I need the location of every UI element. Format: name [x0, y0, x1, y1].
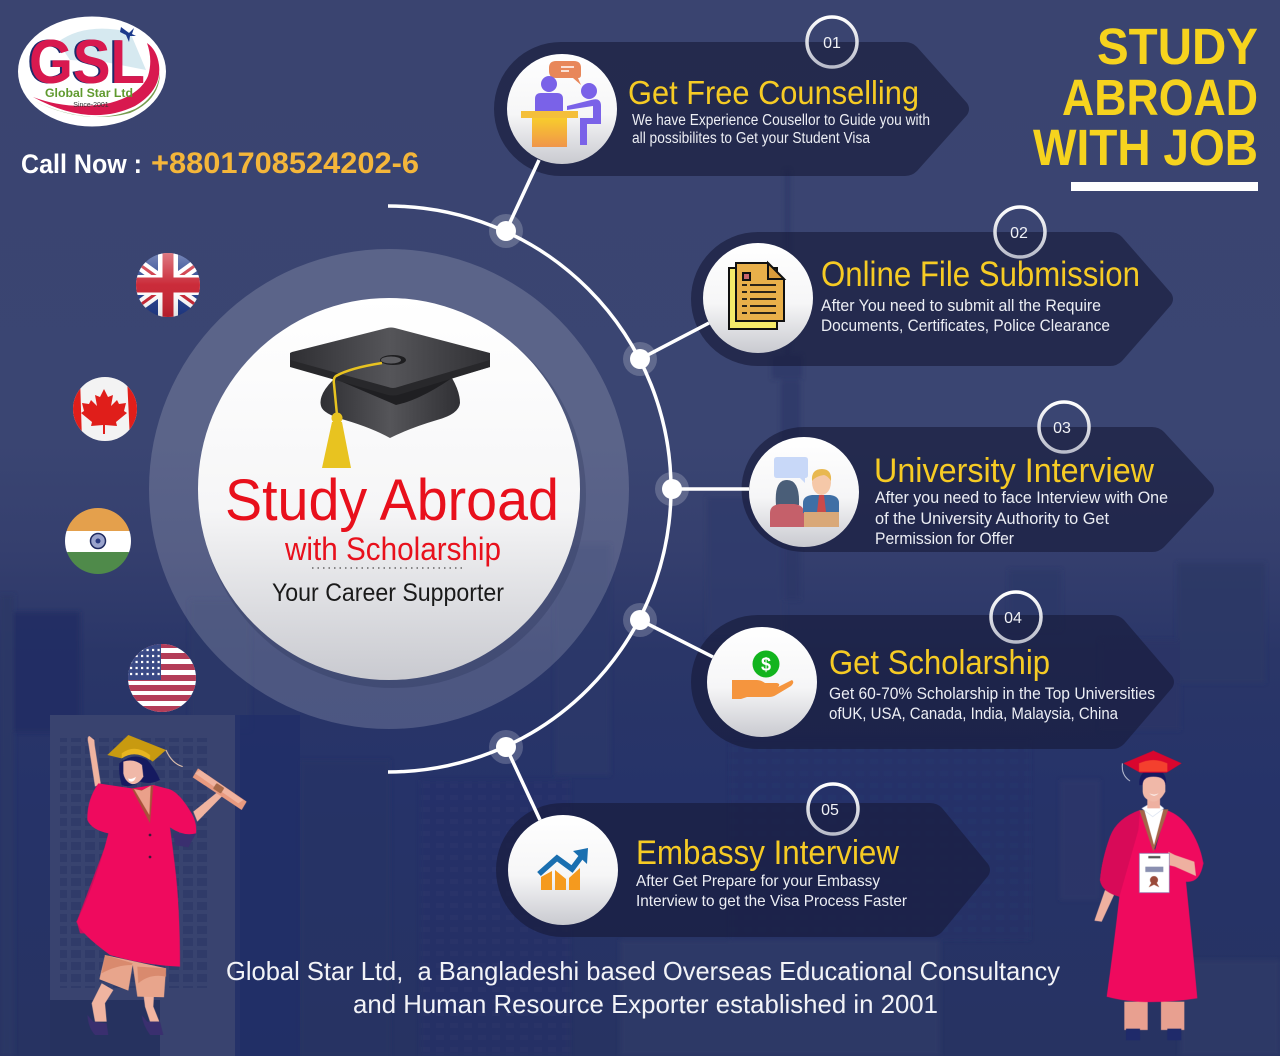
step 02: online file submission — [691, 207, 1173, 366]
step 02: online file submission: After You need to submit all the Require — [821, 297, 1101, 315]
call now phone line: +8801708524202-6 — [151, 147, 419, 180]
footer description: and Human Resource Exporter established in 2001 — [353, 989, 938, 1019]
step number 03: 03 — [1053, 420, 1071, 437]
step 03: university interview: University Interview — [874, 452, 1154, 490]
illustration: male graduate — [1094, 751, 1203, 1040]
headline: Your Career Supporter — [272, 579, 504, 607]
step 04: get scholarship: Get Scholarship — [829, 644, 1050, 682]
step 05: embassy interview: Embassy Interview — [636, 834, 899, 872]
headline — [225, 468, 559, 607]
step 03: university interview: of the University Authority to Get — [875, 510, 1109, 528]
icon: hand with dollar: $ — [761, 654, 771, 674]
icon: rising chart — [539, 848, 588, 890]
call now phone line — [21, 147, 419, 180]
step 05: embassy interview: After Get Prepare for your Embassy — [636, 873, 880, 890]
icon: counsellor at desk — [521, 61, 601, 147]
step number 02: 02 — [1010, 225, 1028, 242]
step 02: online file submission: Online File Submission — [821, 255, 1140, 294]
step 03: university interview — [742, 402, 1214, 552]
step number 01: 01 — [823, 35, 841, 52]
step 05: embassy interview: Interview to get the Visa Process Faster — [636, 893, 908, 910]
step 01: get free counselling — [494, 17, 969, 176]
step 04: get scholarship: ofUK, USA, Canada, India, Malaysia, China — [829, 705, 1119, 723]
footer description: Global Star Ltd, a Bangladeshi based Overseas Educational Consultancy — [226, 956, 1060, 986]
timeline arc with nodes — [388, 160, 749, 820]
step 02: online file submission: Documents, Certificates, Police Clearance — [821, 317, 1110, 335]
headline: Study Abroad — [225, 468, 559, 533]
step 01: get free counselling: all possibilites to Get your Student Visa — [632, 130, 870, 147]
main title: study abroad with job: WITH JOB — [1033, 119, 1258, 176]
icon: hand with dollar — [732, 650, 793, 699]
logo: GSL Global Star Ltd — [18, 16, 166, 126]
footer description — [226, 956, 1060, 1019]
step number 04 — [991, 592, 1041, 642]
main title: study abroad with job — [1033, 18, 1258, 191]
icon: graduation cap — [290, 328, 490, 468]
step 01: get free counselling: Get Free Counselling — [628, 74, 919, 111]
flag: UK — [136, 253, 200, 317]
illustration: female graduate — [77, 735, 247, 1035]
icon: interview people — [770, 457, 839, 527]
flag: USA — [128, 644, 196, 712]
icon: document stack — [729, 263, 784, 329]
main title: study abroad with job: ABROAD — [1062, 69, 1258, 126]
logo: GSL Global Star Ltd: GSL — [27, 28, 143, 97]
step number 02 — [995, 207, 1045, 257]
step number 05 — [808, 784, 858, 834]
step 01: get free counselling: We have Experience Cousellor to Guide you with — [632, 112, 930, 129]
logo: GSL Global Star Ltd: GSL — [29, 28, 145, 97]
step number 04: 04 — [1004, 610, 1022, 627]
logo: GSL Global Star Ltd: Global Star Ltd — [45, 88, 133, 100]
main title: study abroad with job: STUDY — [1097, 18, 1258, 75]
central disc with cap and headline — [149, 249, 629, 729]
flag: India — [65, 508, 131, 574]
step number 01 — [807, 17, 857, 67]
headline: with Scholarship — [284, 531, 501, 567]
step 04: get scholarship: Get 60-70% Scholarship in the Top Universities — [829, 685, 1155, 703]
step 03: university interview: Permission for Offer — [875, 530, 1014, 548]
step number 05: 05 — [821, 802, 839, 819]
flag: Canada — [73, 377, 137, 441]
logo: GSL Global Star Ltd: Since-2001 — [73, 102, 109, 109]
step number 03 — [1039, 402, 1089, 452]
step 03: university interview: After you need to face Interview with One — [875, 489, 1168, 507]
step 05: embassy interview — [496, 784, 990, 937]
step 04: get scholarship — [691, 592, 1174, 749]
call now phone line: Call Now : — [21, 149, 142, 179]
